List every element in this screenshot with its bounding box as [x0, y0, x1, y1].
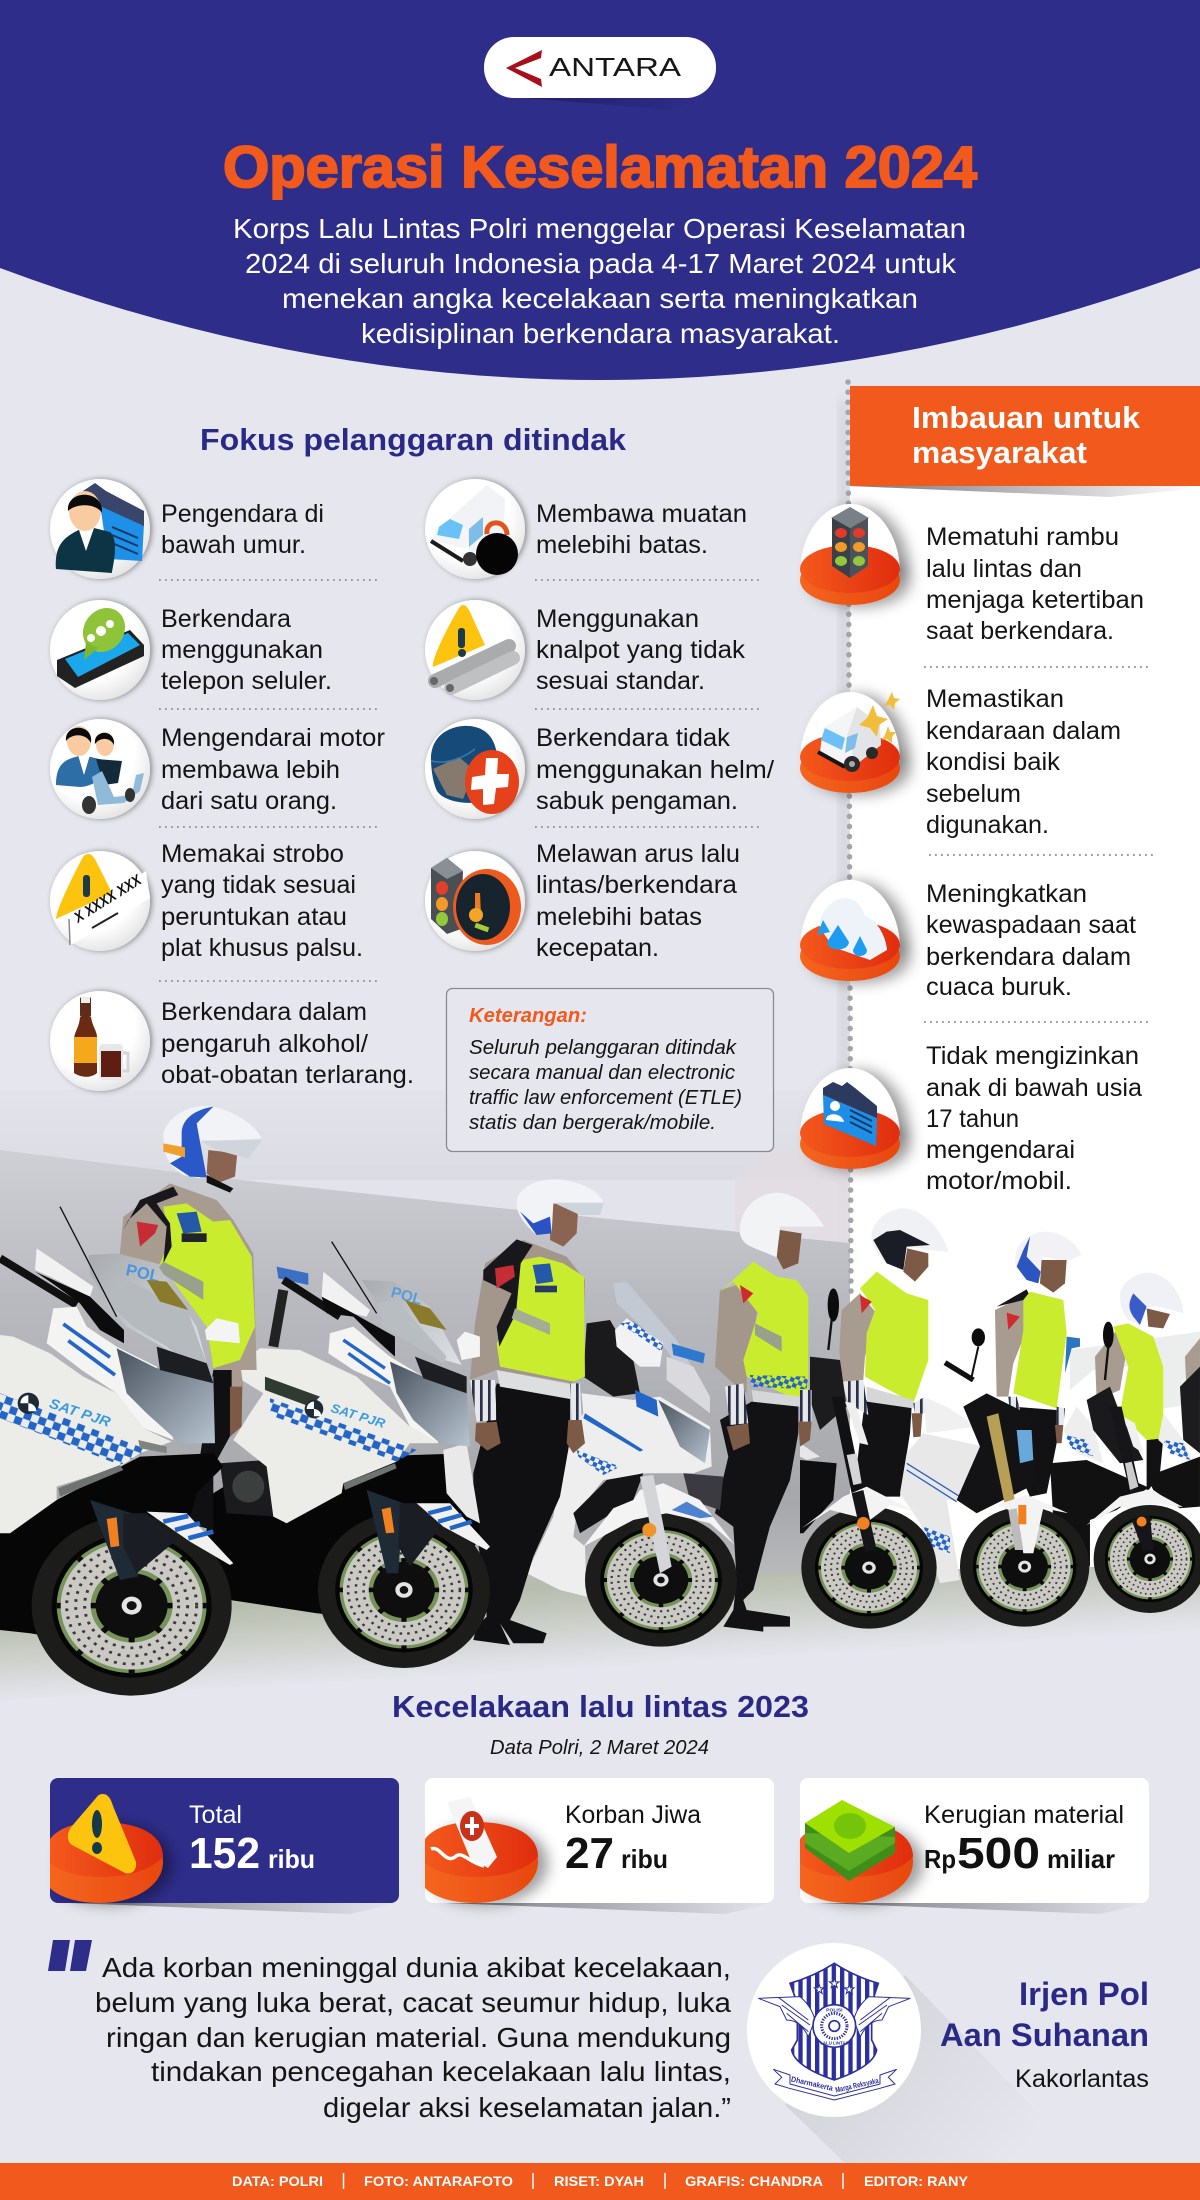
icon: two people on scooter	[50, 719, 150, 819]
officer 7	[1185, 1338, 1200, 1400]
bike 2: SAT PJR	[329, 1401, 388, 1431]
emblem: Korlantas Polri badge: LALU LINTAS	[820, 2041, 848, 2046]
icon: bottle and mug	[50, 991, 150, 1091]
text: Membawa muatan	[536, 500, 747, 528]
text: lintas/berkendara	[536, 871, 737, 899]
intro paragraph: 2024 di seluruh Indonesia pada 4-17 Maret 2024 untuk	[245, 248, 957, 279]
item: knalpot tidak standar	[425, 600, 746, 700]
text: anak di bawah usia	[926, 1074, 1142, 1102]
text: digunakan.	[926, 811, 1049, 839]
icon: warning and licence plate	[50, 851, 150, 951]
text: Berkendara tidak	[536, 724, 730, 752]
text	[536, 605, 746, 695]
text: saat berkendara.	[926, 617, 1114, 645]
bike 2: POL	[389, 1284, 424, 1309]
text: telepon seluler.	[161, 667, 332, 695]
text: Melawan arus lalu	[536, 840, 740, 868]
text	[536, 724, 774, 815]
figures	[189, 1801, 315, 1878]
text: Mengendarai motor	[161, 724, 385, 752]
quote text: tindakan pencegahan kecelakaan lalu lintas,	[151, 2056, 731, 2087]
officer 6	[1095, 1273, 1183, 1493]
text: 17 tahun	[926, 1105, 1019, 1133]
text: Mematuhi rambu	[926, 523, 1119, 551]
officer 3	[715, 1193, 824, 1632]
panel: imbauan white column	[838, 400, 1200, 1596]
text: sebelum	[926, 780, 1021, 808]
bike 1	[0, 1207, 240, 1696]
officer 2	[470, 1179, 604, 1645]
background car	[1070, 1332, 1200, 1408]
icon: shiny van on disc	[800, 692, 900, 793]
text: sabuk pengaman.	[536, 787, 738, 815]
text: kewaspadaan saat	[926, 911, 1136, 939]
photo: officer 3 and bike 3	[470, 1179, 824, 1647]
item: muatan melebihi batas	[425, 479, 747, 579]
text: sesuai standar.	[536, 667, 705, 695]
text	[926, 685, 1121, 839]
text: menggunakan helm/	[536, 756, 774, 784]
heading bar: imbauan untuk masyarakat: Imbauan untuk	[912, 400, 1141, 435]
speaker name: Aan Suhanan	[940, 2017, 1149, 2053]
text	[161, 840, 363, 962]
text	[161, 500, 324, 559]
callout: keterangan: Keterangan:	[469, 1005, 587, 1027]
quote text: Ada korban meninggal dunia akibat kecelakaan,	[102, 1952, 731, 1983]
figures: Korban Jiwa	[565, 1801, 701, 1829]
text: Berkendara dalam	[161, 998, 367, 1026]
long shadow of emblem	[785, 1975, 1095, 2163]
footer bar	[0, 2163, 1200, 2200]
text	[926, 1042, 1142, 1195]
text: Memastikan	[926, 685, 1064, 713]
item: alkohol dan obat-obatan	[50, 991, 414, 1091]
source note: Data Polri, 2 Maret 2024	[490, 1737, 709, 1759]
text	[536, 500, 747, 559]
advice 3: cuaca buruk	[800, 880, 1136, 1001]
text: Berkendara	[161, 605, 291, 633]
intro paragraph	[233, 213, 966, 349]
footer bar: FOTO: ANTARAFOTO	[364, 2173, 513, 2189]
emblem: Korlantas Polri badge: ★	[829, 1976, 840, 1990]
intro paragraph: menekan angka kecelakaan serta meningkatkan	[282, 283, 918, 314]
text: plat khusus palsu.	[161, 934, 363, 962]
quote marks	[48, 1940, 92, 1971]
icon: traffic light and speedometer	[425, 851, 525, 951]
callout: keterangan: secara manual dan electronic	[469, 1062, 735, 1084]
advice 2: kendaraan kondisi baik	[800, 685, 1121, 839]
bike 6	[1050, 1322, 1200, 1613]
text: pengaruh alkohol/	[161, 1030, 368, 1058]
icon: person with ID card	[50, 479, 150, 579]
photo: officers and motorcycles, right group	[800, 1208, 1200, 1629]
emblem: Korlantas Polri badge: ★	[814, 1982, 825, 1996]
text	[926, 880, 1136, 1001]
text: motor/mobil.	[926, 1167, 1072, 1195]
heading: kecelakaan lalu lintas 2023: Kecelakaan lalu lintas 2023	[392, 1689, 809, 1724]
heading bar: imbauan untuk masyarakat	[850, 386, 1200, 497]
text: menggunakan	[161, 636, 323, 664]
text: obat-obatan terlarang.	[161, 1061, 414, 1089]
bike 1: SAT PJR	[47, 1395, 113, 1430]
icon: medical tag on disc	[425, 1797, 538, 1903]
dotted vertical timeline	[848, 382, 851, 1292]
dotted dividers: right column	[924, 667, 1155, 1022]
icon: money stack on disc	[800, 1800, 913, 1903]
item: tanpa helm atau sabuk	[425, 719, 774, 819]
emblem: Korlantas Polri badge: POLISI	[826, 2008, 843, 2014]
bike 5	[900, 1328, 1089, 1627]
text: knalpot yang tidak	[536, 636, 746, 664]
text: Meningkatkan	[926, 880, 1087, 908]
advice 1: rambu lalu lintas	[800, 504, 1144, 645]
footer bar: RISET: DYAH	[554, 2173, 644, 2189]
text: Memakai strobo	[161, 840, 344, 868]
item: pengendara di bawah umur	[50, 479, 324, 579]
item: membawa lebih dari satu orang	[50, 719, 385, 819]
text: berkendara dalam	[926, 943, 1131, 971]
text: peruntukan atau	[161, 903, 347, 931]
header: navy curved banner	[0, 0, 1200, 380]
footer bar: EDITOR: RANY	[864, 2173, 969, 2189]
logo pill: ANTARA	[484, 37, 716, 110]
figures: Rp	[924, 1844, 956, 1874]
figures: 152	[189, 1829, 260, 1878]
icon: warning and licence plate: X XXXX XXX	[70, 871, 145, 927]
speaker name: Irjen Pol	[1019, 1976, 1149, 2012]
item: melawan arus dan batas kecepatan	[425, 840, 740, 962]
figures: Total	[189, 1801, 242, 1829]
intro paragraph: kedisiplinan berkendara masyarakat.	[361, 318, 840, 349]
icon: phone with chat bubble	[50, 600, 150, 700]
text: membawa lebih	[161, 756, 340, 784]
text: bawah umur.	[161, 531, 306, 559]
text	[161, 998, 414, 1089]
quote text: belum yang luka berat, cacat seumur hidup, luka	[95, 1987, 731, 2018]
callout: keterangan: traffic law enforcement (ETLE)	[469, 1087, 742, 1109]
icon: warning and exhaust pipes	[425, 600, 525, 700]
officer 1	[117, 1106, 262, 1530]
icon: ID card on disc	[800, 1068, 900, 1169]
item: telepon seluler	[50, 600, 332, 700]
figures	[924, 1801, 1124, 1878]
item: strobo dan plat palsu	[50, 840, 363, 962]
figures: ribu	[268, 1844, 315, 1874]
bike 4	[800, 1288, 937, 1629]
figures: Kerugian material	[924, 1801, 1124, 1829]
figures: ribu	[621, 1844, 668, 1874]
text: lalu lintas dan	[926, 555, 1082, 583]
text: kecepatan.	[536, 934, 659, 962]
text: Menggunakan	[536, 605, 699, 633]
icon: helmet and medical cross	[425, 719, 525, 819]
stat card: korban jiwa	[425, 1778, 774, 1914]
photo: background haze and ground	[0, 1090, 1200, 1700]
callout: keterangan	[446, 988, 774, 1152]
photo: bikes 1, 2 and officer 1	[0, 1106, 490, 1696]
icon: warning on disc	[50, 1794, 163, 1903]
bike 1: POL	[124, 1260, 162, 1286]
icon: truck with weight	[425, 479, 525, 579]
footer bar: DATA: POLRI	[232, 2173, 323, 2189]
figures	[565, 1801, 701, 1878]
text: menjaga ketertiban	[926, 586, 1144, 614]
officer 5	[995, 1232, 1082, 1497]
footer bar: GRAFIS: CHANDRA	[685, 2173, 823, 2189]
emblem: Korlantas Polri badge: Marga Reksyaka	[834, 2076, 880, 2095]
text	[536, 840, 740, 962]
stat card: total	[50, 1778, 399, 1914]
bike 2	[200, 1242, 490, 1668]
figures: 500	[957, 1829, 1040, 1878]
callout: keterangan: statis dan bergerak/mobile.	[469, 1112, 716, 1134]
stat card: kerugian material	[800, 1778, 1149, 1914]
text	[161, 724, 385, 815]
text: cuaca buruk.	[926, 973, 1072, 1001]
speaker name: Kakorlantas	[1015, 2065, 1149, 2093]
figures: 27	[565, 1829, 614, 1878]
emblem: Korlantas Polri badge	[747, 1943, 921, 2117]
quote text	[95, 1952, 731, 2123]
text: mengendarai	[926, 1136, 1075, 1164]
emblem: Korlantas Polri badge: ★	[844, 1982, 855, 1996]
title: Operasi Keselamatan 2024	[223, 135, 977, 200]
icon: traffic light on disc	[800, 504, 900, 605]
text	[161, 605, 332, 695]
text: melebihi batas.	[536, 531, 708, 559]
quote text: ringan dan kerugian material. Guna mendukung	[106, 2022, 731, 2053]
text: dari satu orang.	[161, 787, 337, 815]
advice 4: anak di bawah 17 tahun	[800, 1042, 1142, 1195]
text: melebihi batas	[536, 903, 702, 931]
text: Tidak mengizinkan	[926, 1042, 1139, 1070]
icon: car in rain on disc	[800, 880, 900, 981]
speaker name	[940, 1976, 1149, 2093]
dotted dividers: left columns	[159, 580, 761, 981]
text: Pengendara di	[161, 500, 324, 528]
figures: miliar	[1047, 1844, 1115, 1874]
quote text: digelar aksi keselamatan jalan.”	[323, 2092, 731, 2123]
logo pill: ANTARA: ANTARA	[549, 52, 682, 82]
intro paragraph: Korps Lalu Lintas Polri menggelar Operasi Keselamatan	[233, 213, 966, 244]
text: yang tidak sesuai	[161, 871, 356, 899]
text: kendaraan dalam	[926, 717, 1121, 745]
text	[926, 523, 1144, 645]
heading: fokus pelanggaran: Fokus pelanggaran ditindak	[200, 422, 627, 457]
bike 3	[527, 1282, 737, 1647]
officer 4	[839, 1208, 948, 1497]
text: kondisi baik	[926, 748, 1060, 776]
heading bar: imbauan untuk masyarakat: masyarakat	[912, 435, 1087, 470]
emblem: Korlantas Polri badge: Dharmakerta	[790, 2074, 834, 2093]
bike 7	[1147, 1367, 1200, 1508]
callout: keterangan: Seluruh pelanggaran ditindak	[469, 1037, 737, 1059]
